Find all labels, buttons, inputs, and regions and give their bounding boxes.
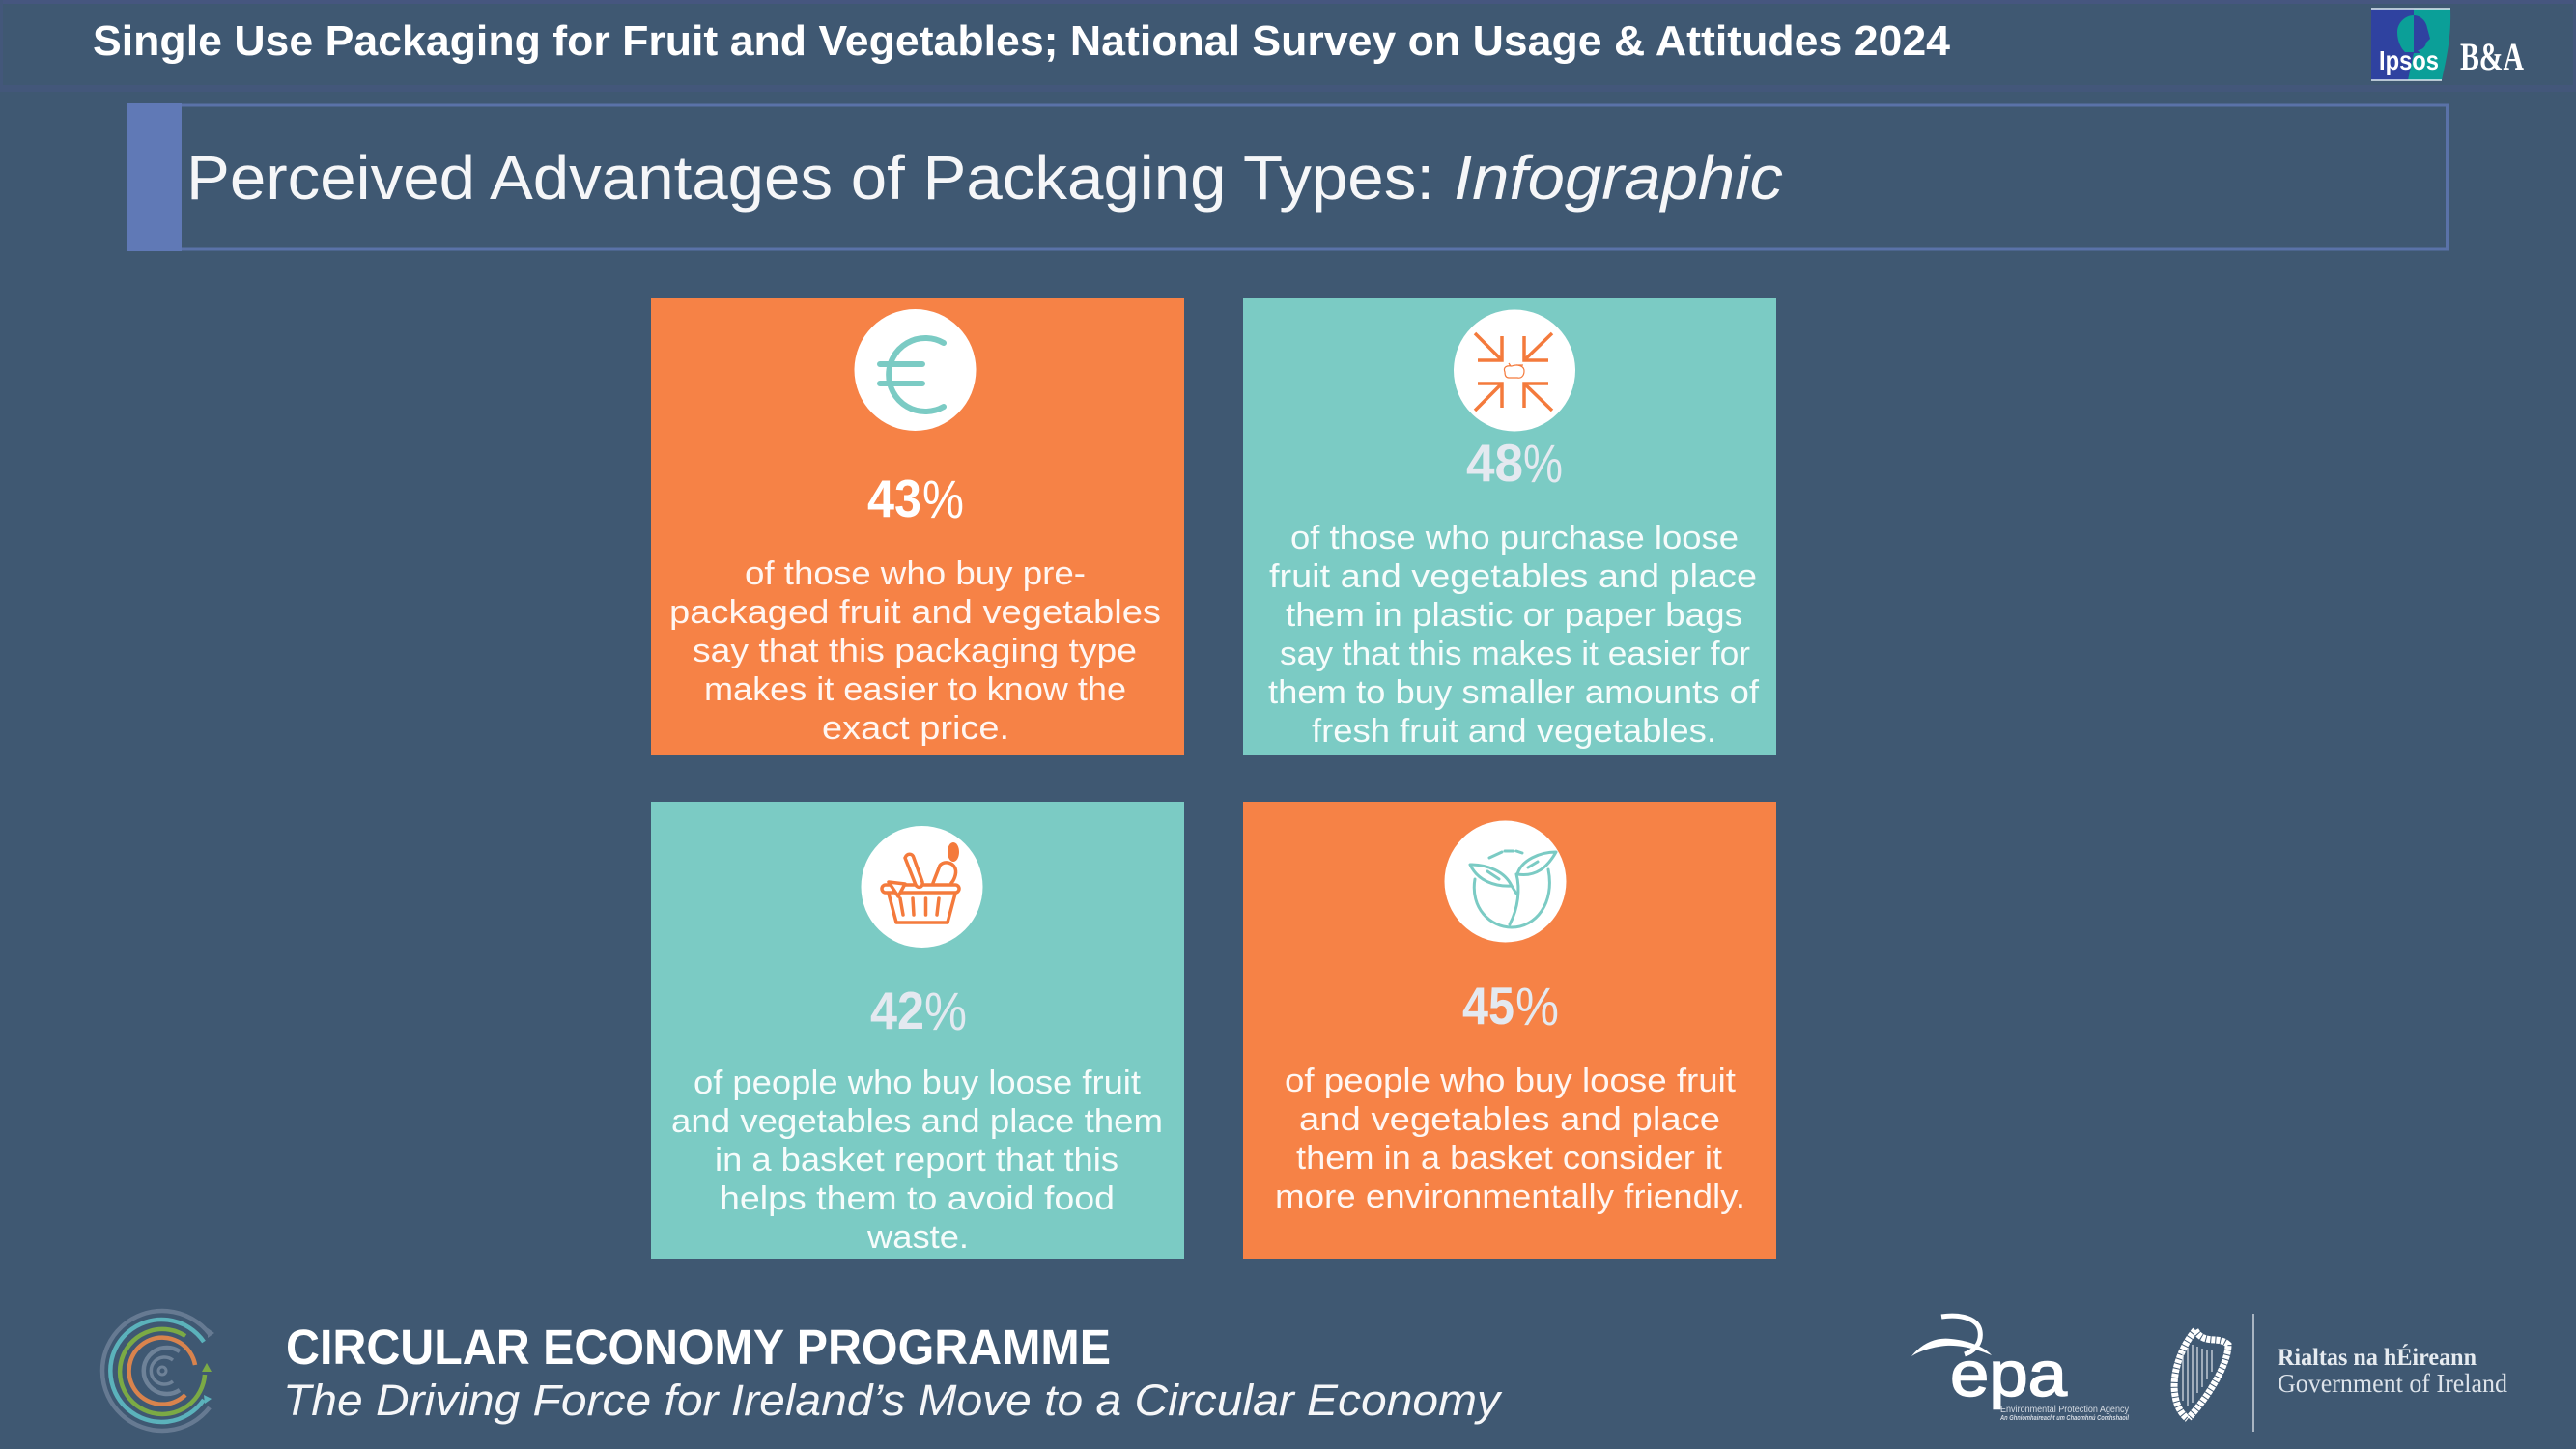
logo: Ipsos [2371,9,2450,80]
logo: EPA: epa [1950,1338,2067,1409]
statistic: 48% [1466,433,1563,494]
statistic: 48%: % [1523,433,1563,494]
logo: EPA: Environmental Protection Agency [2000,1404,2130,1415]
icon: basket [862,826,983,948]
statistic: 43%: % [922,469,964,529]
body text: them in a basket consider it [1296,1140,1723,1177]
statistic: 45% [1462,976,1559,1037]
body text: more environmentally friendly. [1275,1179,1745,1215]
section heading text: Infographic [1454,143,1783,213]
logo text: Government of Ireland [2278,1344,2507,1398]
logo: EPA [1911,1316,2130,1422]
panel: 45% environmentally friendly [1243,802,1776,1259]
body text: waste. [866,1219,969,1256]
statistic: 48%: 48 [1466,433,1523,493]
divider line [2252,1314,2254,1432]
logo: EPA: An Ghníomhaireacht um Chaomhnú Comhshaoil [1999,1413,2130,1422]
body text: them in plastic or paper bags [1286,597,1742,634]
body text: say that this packaging type [693,633,1137,669]
icon: euro [854,309,976,431]
statistic: 45%: 45 [1462,976,1514,1036]
body text: and vegetables and place them [671,1103,1163,1140]
statistic: 42%: 42 [870,980,924,1040]
panel: 43% easier to know price [651,298,1184,755]
footer programme title: CIRCULAR ECONOMY PROGRAMME [286,1320,1111,1375]
statistic: 43% [867,469,964,529]
body text [671,1065,1163,1256]
logo: B&A: B&A [2460,35,2524,78]
body text: helps them to avoid food [720,1180,1115,1217]
statistic: 42% [870,980,967,1041]
footer tagline: The Driving Force for Ireland’s Move to a Circular Economy [283,1376,1503,1425]
body text: fruit and vegetables and place [1269,558,1757,595]
body text [1275,1063,1745,1215]
body text [1268,520,1760,750]
body text: of those who buy pre- [745,555,1086,592]
body text: of people who buy loose fruit [1285,1063,1737,1099]
section heading text: Perceived Advantages of Packaging Types: [186,143,1434,213]
logo: Irish harp [2174,1330,2228,1419]
body text: makes it easier to know the [704,671,1126,708]
icon: leaf sprout in circle [1445,821,1567,943]
body text: exact price. [822,710,1009,747]
logo: circular economy rings [102,1311,214,1431]
body text: fresh fruit and vegetables. [1312,713,1716,750]
logo text: Government of Ireland: Government of Ireland [2278,1369,2507,1398]
body text: them to buy smaller amounts of [1268,674,1760,711]
statistic: 42%: % [924,980,967,1041]
section heading panel [127,103,2448,251]
statistic: 43%: 43 [867,469,921,528]
header title: Single Use Packaging for Fruit and Vegetables; National Survey on Usage & Attitudes 2024 [93,17,1951,65]
icon: inward arrows with apple [1454,309,1575,431]
header band [0,0,2576,92]
panel: 48% smaller amounts [1243,298,1776,755]
body text: and vegetables and place [1299,1101,1720,1138]
body text: in a basket report that this [715,1142,1118,1179]
body text [669,555,1161,747]
body text: of those who purchase loose [1290,520,1739,556]
logo: Ipsos: Ipsos [2379,45,2439,75]
body text: of people who buy loose fruit [694,1065,1142,1101]
body text: packaged fruit and vegetables [669,594,1161,631]
body text: say that this makes it easier for [1280,636,1750,672]
logo text: Government of Ireland: Rialtas na hÉireann [2278,1344,2477,1371]
statistic: 45%: % [1515,976,1559,1037]
panel: 42% avoid food waste [651,802,1184,1259]
